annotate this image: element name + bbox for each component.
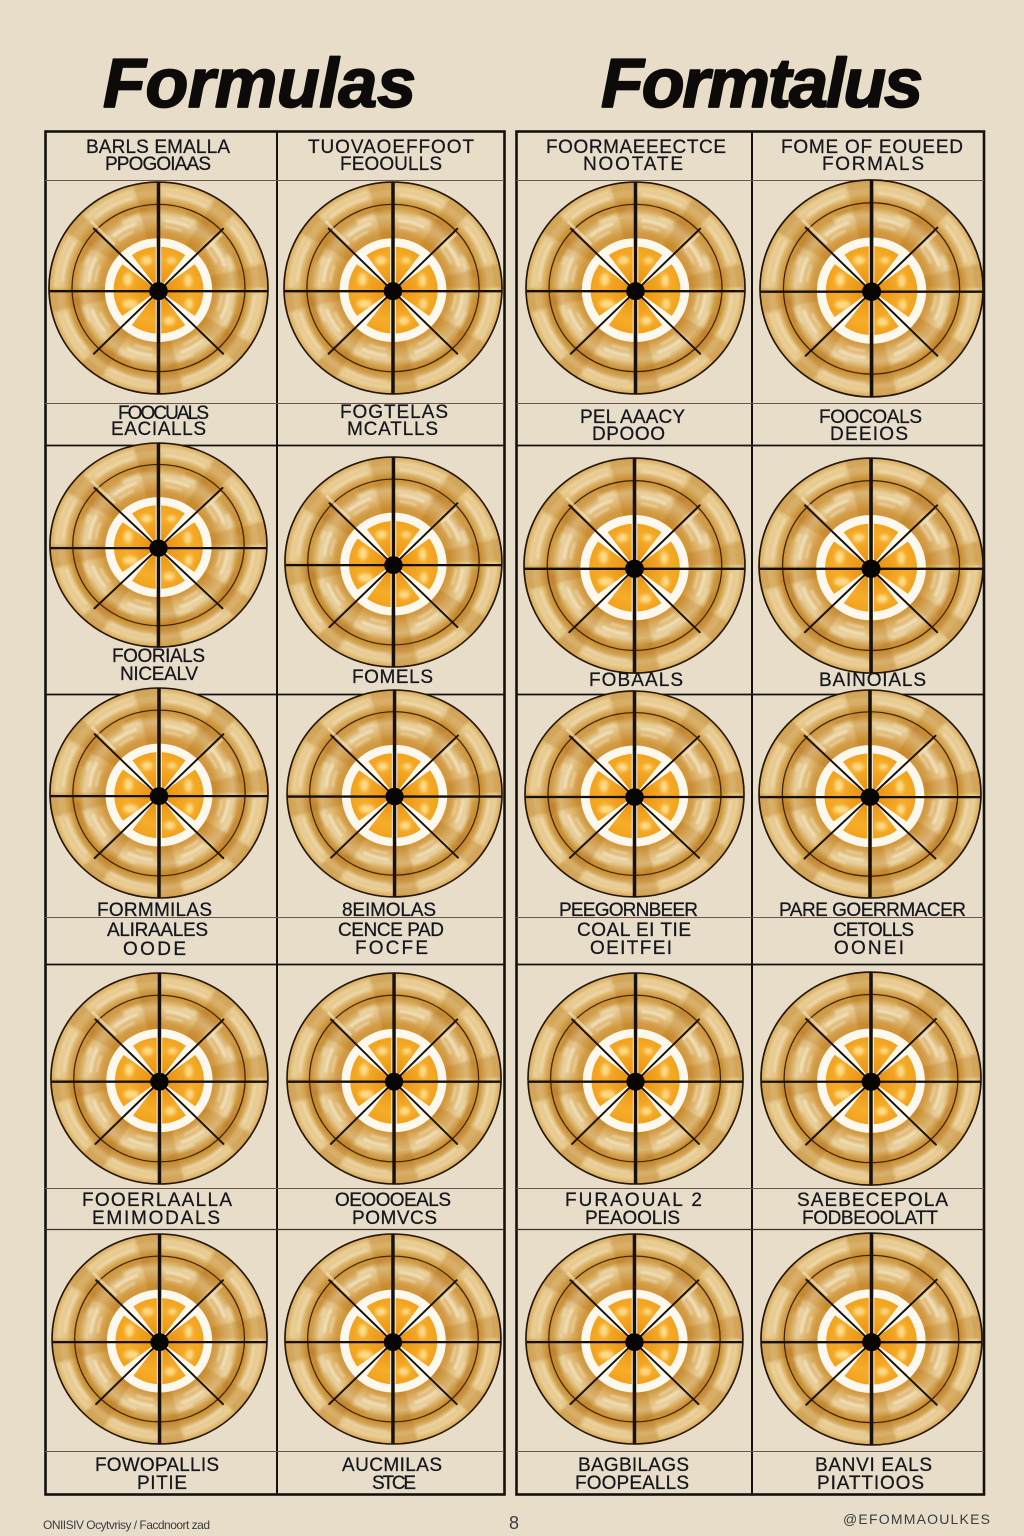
header label: column 4: FOME OF EOUEED — [781, 137, 963, 158]
footer: handle: @EFOMMAOULKES — [843, 1511, 990, 1527]
header label: column 3: FOORMAEEECTCE — [546, 137, 726, 158]
wheel chart: row 1 column 2 — [284, 182, 502, 394]
label: row 5 column 4: PIATTIOOS — [817, 1473, 924, 1494]
label: row 4 column 3: PEAOOLIS — [585, 1208, 680, 1229]
label: row 3 column 4 — [779, 900, 966, 959]
footer: credit: ONIISIV Ocytvrisy / Facdnoort zad — [43, 1518, 210, 1532]
label: row 2 column 2: FOMELS — [352, 667, 433, 688]
wheel chart: row 1 column 1 — [49, 182, 268, 394]
label: row 1 column 3: PEL AAACY — [580, 407, 685, 428]
label: row 3 column 4: CETOLLS — [833, 920, 914, 941]
wheel chart: row 5 column 3 — [526, 1234, 743, 1444]
label: row 5 column 3 — [575, 1455, 689, 1494]
label: row 4 column 1: EMIMODALS — [92, 1208, 220, 1229]
footer: page number: 8 — [509, 1513, 519, 1533]
label: row 2 column 4: BAINOIALS — [819, 670, 926, 691]
wheel chart: row 5 column 2 — [285, 1234, 501, 1444]
label: row 4 column 3: FURAOUAL 2 — [565, 1190, 702, 1211]
title: left heading: Formulas — [103, 44, 416, 122]
label: row 1 column 4: DEEIOS — [830, 424, 908, 445]
wheel chart: row 2 column 4 — [759, 458, 983, 673]
label: row 3 column 2: CENCE PAD — [338, 920, 444, 941]
label: row 5 column 2: AUCMILAS — [342, 1455, 442, 1476]
label: row 3 column 1: FORMMILAS — [97, 900, 212, 921]
header label: column 3 — [546, 137, 726, 175]
wheel chart: row 2 column 1 — [50, 443, 267, 647]
label: row 5 column 1: PITIE — [137, 1473, 187, 1494]
wheel chart: row 2 column 3 — [524, 458, 745, 673]
label: row 1 column 4: FOOCOALS — [819, 407, 922, 428]
label: row 5 column 1 — [95, 1455, 219, 1494]
header label: column 2: FEOOULLS — [340, 154, 442, 175]
wheel chart: row 4 column 3 — [528, 973, 743, 1184]
label: row 1 column 3 — [580, 407, 685, 445]
wheel chart: row 3 column 4 — [759, 690, 981, 898]
panel: right formula table — [516, 131, 984, 1494]
title: right heading: Formtalus — [601, 44, 923, 122]
label: row 1 column 4 — [819, 407, 922, 445]
label: row 3 column 3 — [559, 900, 698, 959]
label: row 3 column 2 — [338, 900, 444, 959]
label: row 3 column 1 — [97, 900, 212, 960]
label: row 1 column 1 — [111, 403, 209, 440]
label: row 4 column 2 — [335, 1190, 451, 1229]
header label: column 1: PPOGOIAAS — [105, 154, 211, 175]
wheel chart: row 4 column 4 — [761, 972, 981, 1185]
label: row 4 column 3 — [565, 1190, 702, 1229]
label: row 3 column 3: COAL EI TIE — [577, 920, 691, 941]
label: row 4 column 4: FODBEOOLATT — [802, 1208, 938, 1229]
label: row 2 column 1 — [112, 646, 205, 685]
header label: column 3: NOOTATE — [583, 154, 683, 175]
label: row 1 column 2: FOGTELAS — [340, 402, 448, 423]
label: row 1 column 3: DPOOO — [592, 424, 665, 445]
wheel chart: row 1 column 4 — [760, 180, 983, 397]
wheel chart: row 5 column 4 — [761, 1233, 982, 1445]
label: row 5 column 4 — [815, 1455, 932, 1494]
label: row 3 column 1: ALIRAALES — [107, 920, 208, 941]
wheel chart: row 3 column 1 — [50, 688, 268, 898]
label: row 4 column 4 — [797, 1190, 948, 1229]
header label: column 4: FORMALS — [822, 154, 924, 175]
label: row 2 column 1: NICEALV — [120, 664, 198, 685]
header label: column 1: BARLS EMALLA — [86, 137, 230, 158]
wheel chart: row 3 column 2 — [287, 690, 502, 897]
label: row 3 column 2: 8EIMOLAS — [342, 900, 436, 921]
label: row 1 column 1: EACIALLS — [111, 419, 206, 440]
label: row 4 column 1 — [82, 1190, 232, 1229]
panel: left formula table — [45, 131, 504, 1494]
label: row 5 column 2: STCE — [372, 1473, 416, 1494]
label: row 3 column 2: FOCFE — [355, 938, 428, 959]
label: row 3 column 3: OEITFEI — [590, 938, 672, 959]
label: row 5 column 4: BANVI EALS — [815, 1455, 932, 1476]
wheel chart: row 1 column 3 — [526, 182, 745, 394]
label: row 2 column 1: FOORIALS — [112, 646, 205, 667]
header label: column 1 — [86, 137, 230, 175]
label: row 4 column 2: OEOOOEALS — [335, 1190, 451, 1211]
wheel chart: row 3 column 3 — [525, 691, 744, 897]
label: row 5 column 2 — [342, 1455, 442, 1494]
header label: column 4 — [781, 137, 963, 175]
label: row 3 column 4: OONEI — [834, 938, 904, 959]
label: row 1 column 2: MCATLLS — [347, 419, 438, 440]
label: row 3 column 1: OODE — [123, 939, 186, 960]
label: row 4 column 4: SAEBECEPOLA — [797, 1190, 948, 1211]
label: row 5 column 3: FOOPEALLS — [575, 1473, 689, 1494]
header label: column 2: TUOVAOEFFOOT — [308, 137, 474, 158]
wheel chart: row 2 column 2 — [285, 457, 502, 667]
label: row 1 column 2 — [340, 402, 448, 440]
label: row 5 column 3: BAGBILAGS — [578, 1455, 689, 1476]
wheel chart: row 5 column 1 — [52, 1234, 267, 1444]
label: row 4 column 1: FOOERLAALLA — [82, 1190, 232, 1211]
wheel chart: row 4 column 1 — [51, 973, 268, 1184]
label: row 3 column 4: PARE GOERRMACER — [779, 900, 966, 921]
label: row 2 column 3: FOBAALS — [589, 670, 683, 691]
label: row 3 column 3: PEEGORNBEER — [559, 900, 698, 921]
header label: column 2 — [308, 137, 474, 175]
wheel chart: row 4 column 2 — [287, 973, 501, 1184]
label: row 4 column 2: POMVCS — [352, 1208, 437, 1229]
label: row 5 column 1: FOWOPALLIS — [95, 1455, 219, 1476]
label: row 1 column 1: FOOCUALS — [118, 403, 209, 424]
